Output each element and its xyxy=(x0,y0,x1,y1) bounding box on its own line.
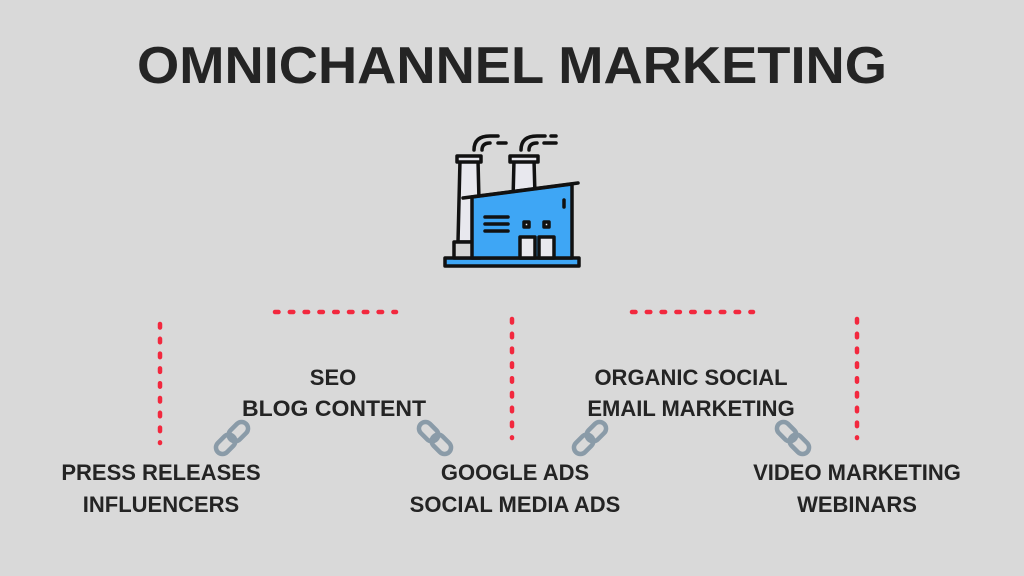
label: VIDEO MARKETING / WEBINARS xyxy=(753,460,961,517)
label: SEO / BLOG CONTENT: BLOG CONTENT xyxy=(242,396,427,421)
dotted connectors xyxy=(160,312,857,443)
icon: chain 3 xyxy=(571,419,609,457)
label: PRESS RELEASES / INFLUENCERS xyxy=(61,460,261,517)
label: VIDEO MARKETING / WEBINARS: WEBINARS xyxy=(797,492,917,517)
title: OMNICHANNEL MARKETING xyxy=(137,37,887,95)
label: PRESS RELEASES / INFLUENCERS: INFLUENCERS xyxy=(83,492,239,517)
label: SEO / BLOG CONTENT: SEO xyxy=(310,365,356,390)
icon: chain 4 xyxy=(774,419,812,457)
label: SEO / BLOG CONTENT xyxy=(242,365,427,421)
icon: chain 2 xyxy=(416,419,454,457)
label: GOOGLE ADS / SOCIAL MEDIA ADS xyxy=(410,460,620,517)
label: ORGANIC SOCIAL / EMAIL MARKETING xyxy=(587,365,795,421)
label: ORGANIC SOCIAL / EMAIL MARKETING: ORGANIC SOCIAL xyxy=(594,365,788,390)
icon: factory xyxy=(445,136,579,266)
label: PRESS RELEASES / INFLUENCERS: PRESS RELEASES xyxy=(61,460,261,485)
icon: chain 1 xyxy=(213,419,251,457)
label: GOOGLE ADS / SOCIAL MEDIA ADS: GOOGLE ADS xyxy=(441,460,589,485)
label: VIDEO MARKETING / WEBINARS: VIDEO MARKETING xyxy=(753,460,961,485)
label: ORGANIC SOCIAL / EMAIL MARKETING: EMAIL MARKETING xyxy=(587,396,795,421)
label: GOOGLE ADS / SOCIAL MEDIA ADS: SOCIAL MEDIA ADS xyxy=(410,492,620,517)
